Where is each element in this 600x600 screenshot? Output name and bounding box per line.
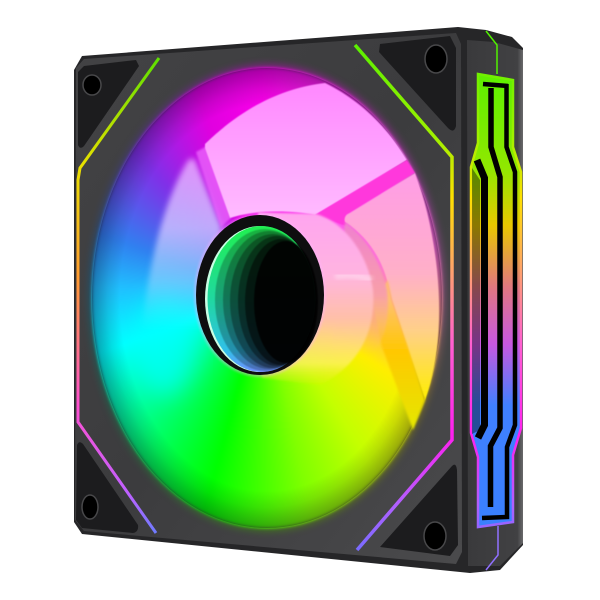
black divider stripes: [477, 84, 515, 518]
hub cylinder: [258, 212, 388, 385]
soft cyan glow, lower left: [135, 295, 195, 395]
fan strut: upper left: [196, 146, 231, 228]
fan rim shading: [92, 68, 442, 528]
side seam line: bottom: [486, 526, 498, 570]
corner pad: bottom left: [76, 442, 138, 533]
corner pad: top right: [379, 36, 456, 131]
front LED strip: left: [78, 58, 159, 533]
fan glow halo: [89, 65, 445, 531]
side seam line: top: [486, 31, 497, 74]
left channel shade: [472, 168, 480, 434]
fan blade: top right: [205, 83, 407, 218]
side panel light channel: [471, 74, 521, 527]
corner pad: bottom right: [380, 465, 458, 556]
fan blade: left: [142, 159, 222, 330]
front LED strip: right: [355, 45, 452, 550]
hub infinity mirror: [194, 213, 326, 377]
fan strut: lower right: [372, 280, 425, 430]
fan light disc: [92, 68, 442, 528]
fan strut: upper right: [315, 160, 415, 226]
fan blade: right: [345, 173, 439, 400]
corner pad: top left: [78, 60, 139, 148]
